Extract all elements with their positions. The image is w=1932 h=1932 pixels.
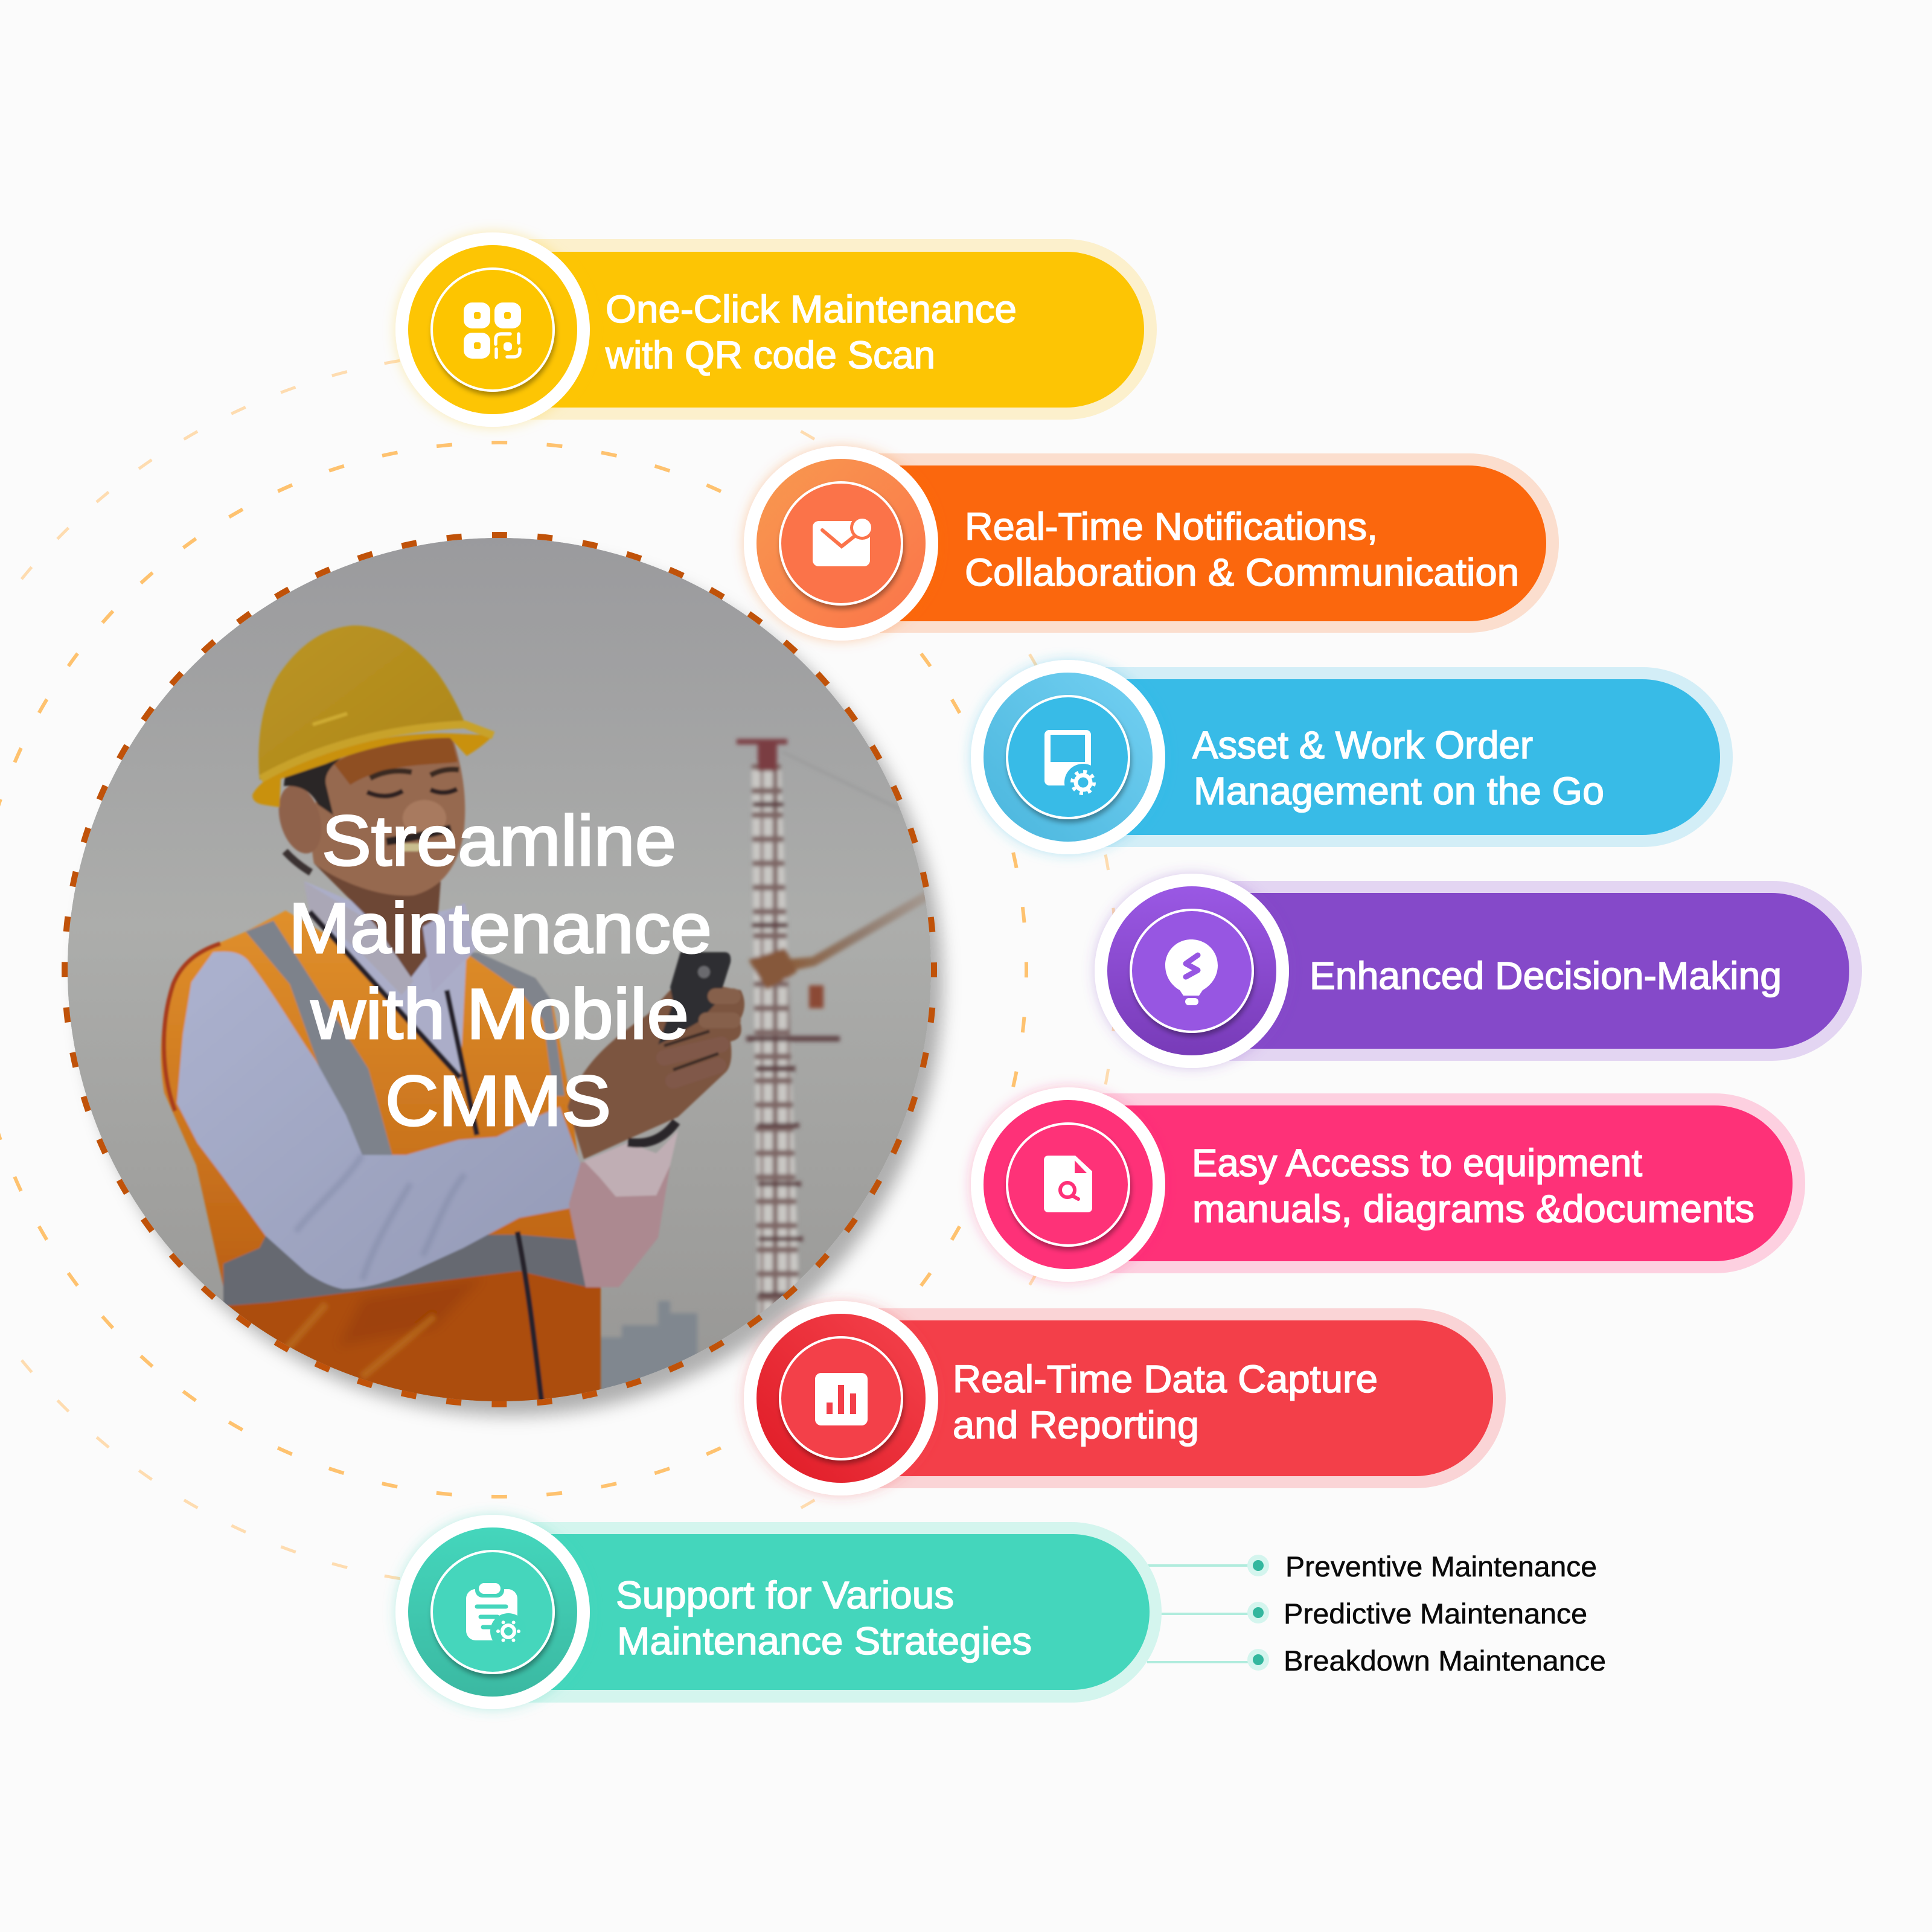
badge fill (984, 1100, 1153, 1269)
pill (984, 679, 1720, 835)
label line 2: Management on the Go (1194, 769, 1604, 813)
eyes (367, 789, 457, 796)
pill halo (396, 239, 1157, 420)
photo dashed border (65, 535, 934, 1404)
label: Easy Access to equipment (1192, 1141, 1642, 1185)
badge ring (780, 482, 902, 604)
lower reflective band (223, 1235, 589, 1306)
badge fill (984, 673, 1153, 842)
pill (408, 1534, 1150, 1690)
crane hook (809, 985, 824, 1008)
label: Support for Various (616, 1573, 954, 1617)
icon: tablet with gear (1044, 730, 1102, 801)
crane top (737, 739, 787, 771)
pill (408, 252, 1144, 408)
icon: light bulb with bolt (1165, 939, 1218, 1005)
moustache (386, 828, 451, 842)
left arm and forearm (177, 952, 587, 1289)
neck (314, 863, 441, 978)
badge (744, 446, 938, 641)
nose (403, 800, 446, 836)
badge ring (432, 1551, 554, 1673)
photo shadow disc (68, 538, 931, 1401)
forehead shade (334, 737, 458, 785)
item 5: documents (971, 1087, 1805, 1282)
photo: worker with phone and crane (60, 531, 942, 1419)
left reflective strap (246, 921, 392, 1156)
lower fingers (664, 1044, 721, 1081)
pill halo (396, 1522, 1162, 1703)
icon: bar chart (815, 1373, 868, 1425)
label: Enhanced Decision-Making (1310, 954, 1782, 997)
vest body (159, 909, 579, 1308)
hair (284, 747, 354, 815)
fingers (706, 996, 733, 1020)
label: Real-Time Notifications, (965, 505, 1378, 548)
main title: CMMS (385, 1061, 611, 1141)
badge ring (780, 1337, 902, 1459)
helmet underside (252, 734, 493, 807)
worker figure (161, 625, 744, 1413)
crane cross bars (746, 802, 840, 1297)
sub-item: breakdown: Breakdown Maintenance (1284, 1645, 1606, 1677)
item 1: QR scan (395, 232, 1157, 427)
phone (658, 952, 731, 1044)
label line 2: Collaboration & Communication (965, 551, 1519, 594)
shirt opening (305, 881, 477, 1081)
main title: Streamline (322, 801, 676, 881)
label line 2: manuals, diagrams &documents (1192, 1187, 1754, 1230)
badge fill (756, 1314, 926, 1483)
badge (395, 1515, 590, 1709)
phone camera (698, 966, 710, 978)
badge (971, 1087, 1165, 1282)
collar right (423, 903, 475, 993)
inner dashed orbit (0, 443, 1026, 1497)
crane jib tie (782, 752, 900, 809)
main title: Maintenance (289, 889, 712, 968)
badge ring (1131, 910, 1253, 1032)
label: Real-Time Data Capture (953, 1357, 1378, 1401)
label: One-Click Maintenance (606, 287, 1017, 331)
icon: clipboard with gear (466, 1579, 526, 1649)
pill halo (1095, 881, 1862, 1061)
badge (1095, 874, 1289, 1068)
badge (971, 660, 1165, 854)
badge fill (408, 245, 577, 414)
item 7 connectors (1147, 1566, 1258, 1662)
head (312, 737, 465, 896)
zipper line (310, 912, 542, 1407)
crane hub (749, 948, 797, 990)
pill halo (745, 453, 1559, 633)
wrist and hand (568, 986, 744, 1159)
pill halo (971, 1093, 1805, 1273)
vest bottom panel (229, 1271, 601, 1413)
item 4: decision making (1095, 874, 1862, 1068)
pill (984, 1105, 1793, 1261)
badge (395, 232, 590, 427)
helmet brim (261, 724, 493, 779)
photo sky (60, 531, 942, 1407)
helmet dome (258, 625, 466, 780)
side hair (285, 851, 311, 872)
icon: document search (1044, 1156, 1092, 1212)
vest red piping (164, 944, 220, 1111)
badge fill (756, 459, 926, 628)
crane jib (779, 889, 930, 973)
pill halo (971, 667, 1733, 847)
label: Asset & Work Order (1192, 723, 1533, 767)
label line 2: and Reporting (953, 1403, 1199, 1447)
badge ring (432, 269, 554, 391)
item 2: notifications (744, 446, 1559, 641)
ear (272, 780, 328, 859)
badge fill (1107, 886, 1276, 1055)
collar left (304, 881, 414, 995)
badge ring (1007, 696, 1129, 818)
right reflective strap (465, 952, 565, 1096)
pill (1107, 893, 1849, 1049)
vest light streak (284, 1304, 435, 1377)
pill (757, 465, 1546, 621)
main title: with Mobile (310, 974, 689, 1054)
right sleeve lower (569, 1162, 670, 1287)
item 6: data capture (744, 1301, 1506, 1495)
badge ring (1007, 1124, 1129, 1246)
pill (757, 1320, 1493, 1476)
vest bottom shading (338, 1277, 483, 1346)
icon: QR code (464, 302, 521, 359)
label line 2: with QR code Scan (605, 333, 935, 377)
badge (744, 1301, 938, 1495)
finger gap lines (664, 1031, 718, 1070)
main title (289, 801, 712, 1141)
watch (628, 1122, 676, 1143)
label line 2: Maintenance Strategies (617, 1619, 1032, 1663)
outer dashed orbit (0, 353, 1116, 1587)
distant buildings (600, 1300, 698, 1390)
sub-item: preventive: Preventive Maintenance (1285, 1550, 1597, 1582)
teeth (403, 843, 420, 851)
item 3: asset and work order (971, 660, 1733, 854)
item 7: strategies (395, 1515, 1162, 1709)
crane tower (750, 762, 800, 1316)
crane (734, 737, 926, 1316)
shirt folds (296, 1155, 465, 1280)
right cuff (584, 1131, 678, 1197)
sub-item: predictive: Predictive Maintenance (1284, 1598, 1587, 1630)
eyebrows (370, 769, 459, 778)
badge fill (408, 1527, 577, 1697)
pill halo (745, 1308, 1506, 1488)
icon: envelope (813, 516, 874, 566)
helmet slot (313, 714, 347, 724)
